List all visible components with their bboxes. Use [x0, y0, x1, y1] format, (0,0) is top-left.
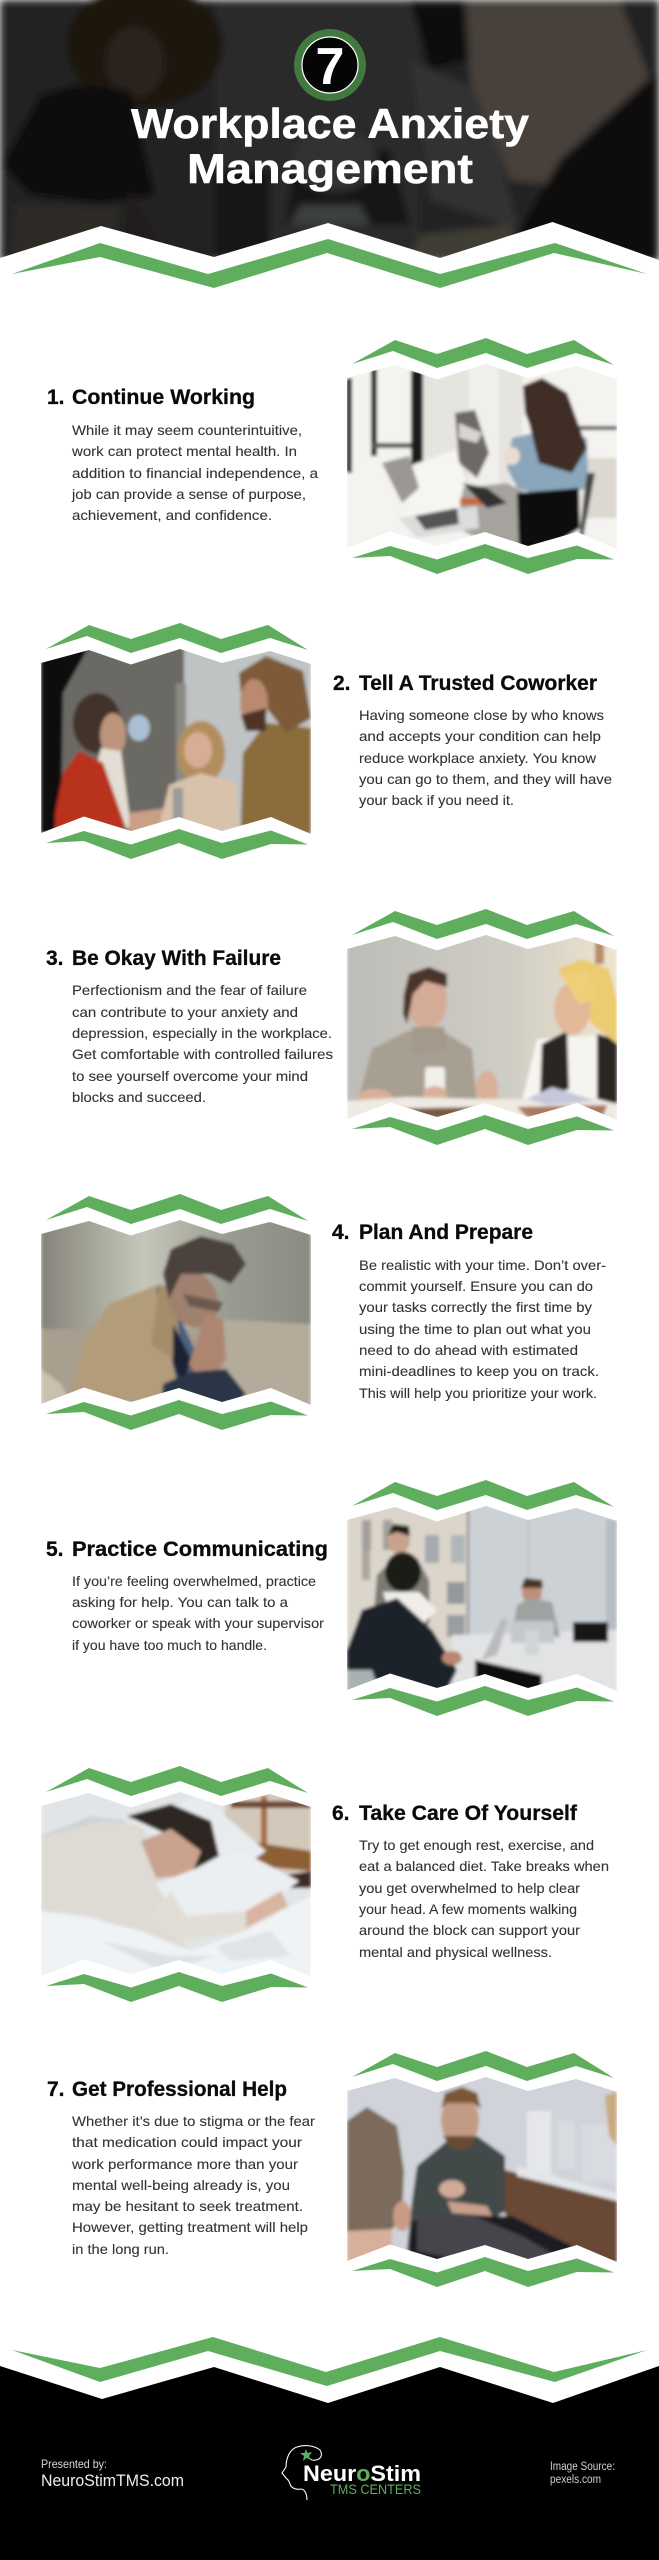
text block: However, getting treatment will help	[72, 2219, 308, 2235]
presented by	[41, 2457, 184, 2490]
image source: pexels.com	[550, 2474, 601, 2486]
text block: eat a balanced diet. Take breaks when	[359, 1858, 609, 1874]
photo: woman at laptop	[347, 338, 617, 574]
text block: Having someone close by who knows	[359, 707, 604, 723]
photo: three coworkers	[41, 623, 311, 859]
text block: work performance more than your	[71, 2156, 298, 2172]
black footer zigzag	[0, 2366, 659, 2560]
photo: two women talking	[347, 909, 617, 1145]
badge: number seven	[294, 29, 366, 101]
footer	[0, 2337, 659, 2560]
text block: and accepts your condition can help	[359, 728, 601, 744]
panel: 2 Tell A Trusted Coworker	[41, 623, 612, 859]
text block: around the block can support your	[359, 1922, 580, 1938]
heading: 4.	[332, 1221, 350, 1244]
text block: Perfectionism and the fear of failure	[72, 982, 307, 998]
text block: Get comfortable with controlled failures	[72, 1046, 333, 1062]
text block: in the long run.	[72, 2241, 169, 2257]
text block	[71, 422, 318, 523]
text block: Whether it’s due to stigma or the fear	[72, 2113, 315, 2129]
green zigzag band	[12, 239, 647, 288]
panel: 1 Continue Working	[47, 338, 617, 574]
text block: your tasks correctly the first time by	[359, 1299, 592, 1315]
text block	[359, 707, 612, 808]
photo: woman sleeping	[41, 1766, 311, 2002]
text block	[71, 2113, 315, 2257]
text block: mental well-being already is, you	[72, 2177, 290, 2193]
text block: your back if you need it.	[359, 792, 514, 808]
text block	[72, 982, 333, 1105]
text block: achievement, and confidence.	[72, 507, 272, 523]
text block: you get overwhelmed to help clear	[359, 1880, 580, 1896]
heading: 1.	[47, 386, 65, 409]
panel: 5 Practice Communicating	[46, 1480, 617, 1716]
text block	[359, 1257, 606, 1401]
text block: using the time to plan out what you	[359, 1321, 591, 1337]
text block: blocks and succeed.	[72, 1089, 206, 1105]
white zigzag edge	[0, 222, 659, 310]
heading: Be Okay With Failure	[72, 947, 281, 970]
header photo background	[0, 0, 659, 270]
heading: 2.	[333, 672, 351, 695]
text block: job can provide a sense of purpose,	[71, 486, 306, 502]
text block: you can go to them, and they will have	[359, 771, 612, 787]
presented by: NeuroStimTMS.com	[41, 2471, 184, 2490]
panel: 3 Be Okay With Failure	[46, 909, 617, 1145]
heading: Practice Communicating	[72, 1538, 328, 1561]
heading: 7.	[47, 2078, 65, 2101]
text block: work can protect mental health. In	[71, 443, 297, 459]
badge: number seven: 7	[316, 38, 344, 96]
text block: commit yourself. Ensure you can do	[359, 1278, 593, 1294]
text block: addition to financial independence, a	[72, 465, 318, 481]
heading: Get Professional Help	[72, 2078, 287, 2101]
title: Workplace Anxiety	[131, 100, 530, 147]
text block: if you have too much to handle.	[72, 1637, 267, 1653]
panel: 6 Take Care Of Yourself	[41, 1766, 609, 2002]
photo: therapy session	[347, 2051, 617, 2287]
heading: Continue Working	[72, 386, 255, 409]
presented by: Presented by:	[41, 2457, 107, 2471]
text block: Try to get enough rest, exercise, and	[359, 1837, 594, 1853]
panel: 7 Get Professional Help	[47, 2051, 617, 2287]
heading: Plan And Prepare	[359, 1221, 533, 1244]
text block: can contribute to your anxiety and	[72, 1004, 298, 1020]
title: Management	[187, 145, 473, 192]
logo: NeuroStim: NeuroStim	[303, 2461, 421, 2486]
header banner	[0, 0, 659, 310]
heading: 6.	[332, 1802, 350, 1825]
panel: 4 Plan And Prepare	[41, 1194, 606, 1430]
heading: Tell A Trusted Coworker	[359, 672, 597, 695]
text block	[72, 1573, 324, 1653]
text block: If you’re feeling overwhelmed, practice	[72, 1573, 316, 1589]
logo: NeuroStim: TMS CENTERS	[330, 2481, 421, 2497]
text block: that medication could impact your	[72, 2134, 302, 2150]
text block: This will help you prioritize your work.	[359, 1385, 597, 1401]
text block	[359, 1837, 609, 1960]
logo: NeuroStim	[282, 2446, 421, 2500]
heading: 5.	[46, 1538, 64, 1561]
text block: coworker or speak with your supervisor	[72, 1615, 324, 1631]
image source: Image Source:	[550, 2461, 615, 2473]
heading: Take Care Of Yourself	[359, 1802, 578, 1825]
text block: mental and physical wellness.	[359, 1944, 552, 1960]
text block: may be hesitant to seek treatment.	[72, 2198, 303, 2214]
heading: 3.	[46, 947, 64, 970]
text block: need to do ahead with estimated	[359, 1342, 578, 1358]
text block: mini-deadlines to keep you on track.	[359, 1363, 599, 1379]
image source	[550, 2461, 615, 2486]
text block: While it may seem counterintuitive,	[72, 422, 302, 438]
text block: your head. A few moments walking	[359, 1901, 577, 1917]
title	[131, 100, 530, 192]
text block: asking for help. You can talk to a	[72, 1594, 288, 1610]
photo: worried man	[41, 1194, 311, 1430]
text block: depression, especially in the workplace.	[72, 1025, 332, 1041]
text block: Be realistic with your time. Don’t over-	[359, 1257, 606, 1273]
text block: to see yourself overcome your mind	[72, 1068, 308, 1084]
text block: reduce workplace anxiety. You know	[359, 750, 597, 766]
photo: office meeting	[347, 1480, 617, 1716]
green zigzag band	[12, 2337, 647, 2386]
